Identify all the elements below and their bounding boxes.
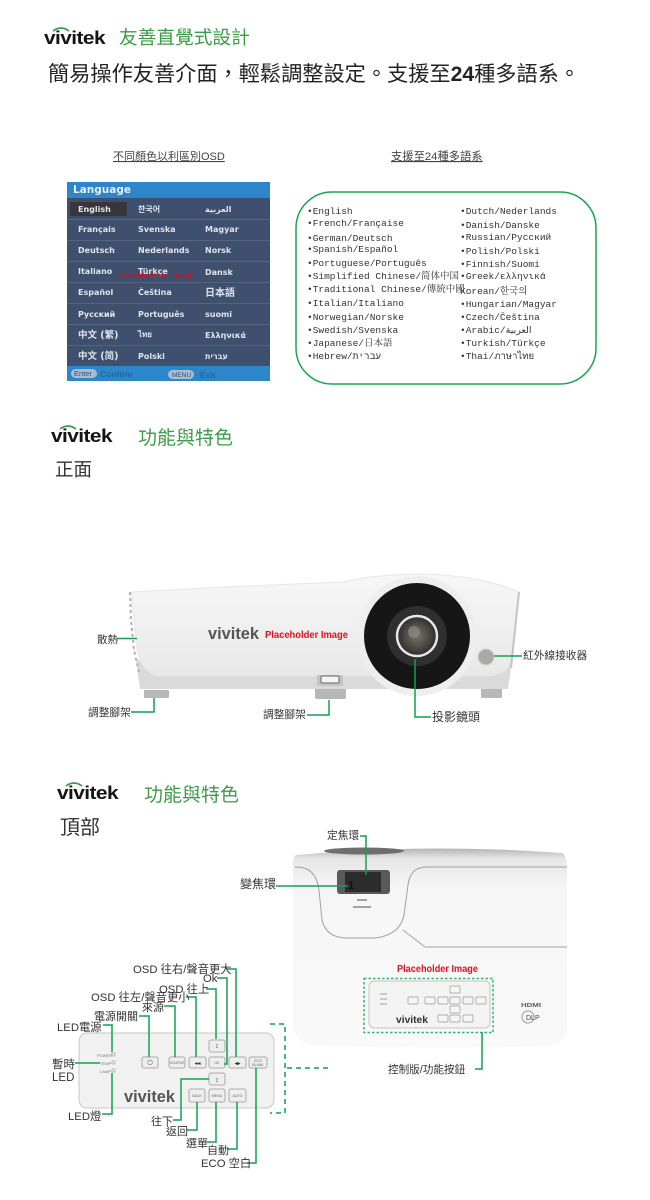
callout: source: 來源 <box>142 1000 164 1014</box>
language list right column: •Turkish/Türkçe <box>460 338 546 349</box>
green title: 功能與特色 <box>138 427 233 449</box>
LED indicators <box>97 1053 115 1074</box>
OSD language labels: Nederlands <box>138 246 190 255</box>
language list left column: •English <box>307 206 353 217</box>
projector top view <box>293 848 567 1048</box>
callout: control panel buttons <box>388 1032 482 1076</box>
OSD language labels: suomi <box>205 310 232 319</box>
vivitek logo: vivitek <box>51 425 113 446</box>
caption: OSD colours: 不同顏色以利區別OSD <box>113 149 225 163</box>
shell <box>131 574 519 676</box>
vents <box>130 592 139 672</box>
feet <box>144 686 502 699</box>
callout: back: 返回 <box>166 1124 188 1138</box>
callout: lamp LED: LED燈 <box>68 1109 101 1123</box>
language list left column: •Japanese/日本語 <box>307 337 393 349</box>
language list right column: •Dutch/Nederlands <box>460 206 557 217</box>
centre foot button <box>317 675 343 686</box>
language list left column: •Traditional Chinese/傳統中國 <box>307 283 465 295</box>
vivitek logo: vivitek <box>57 782 119 803</box>
callout: power <box>94 1009 149 1057</box>
panel: OSD language menu <box>67 182 270 381</box>
OSD language labels: 中文 (繁) <box>78 329 118 341</box>
projector front view <box>130 574 519 699</box>
language list left column: •German/Deutsch <box>307 233 393 244</box>
selected row <box>70 202 127 216</box>
callout: LED power <box>57 1020 112 1052</box>
language list left column: •Italian/Italiano <box>307 298 404 309</box>
OSD language labels: English <box>78 205 111 214</box>
callout: focus ring <box>327 829 366 875</box>
DLP mark: DLP <box>526 1015 540 1022</box>
callout: lens <box>415 659 480 724</box>
callout: left foot <box>88 698 154 719</box>
callout: OSD right: OSD 往右/聲音更大 <box>133 962 232 976</box>
language list left column: •French/Française <box>307 218 404 229</box>
section 2 heading: features <box>51 425 233 449</box>
callout: down <box>151 1079 209 1128</box>
callout: zoom ring <box>240 876 348 891</box>
callouts: control panel <box>52 962 256 1170</box>
DLP mark <box>522 1011 540 1023</box>
green title: 功能與特色 <box>144 784 239 806</box>
callout: menu <box>186 1102 216 1150</box>
callout: down: 往下 <box>151 1114 173 1128</box>
language list right column: •Arabic/العربية <box>460 325 532 336</box>
IR receiver <box>478 649 494 665</box>
placeholder mark: Placeholder Image <box>397 963 478 975</box>
buttons: SOURCE <box>170 1061 185 1065</box>
vivitek logo: vivitek <box>44 27 106 48</box>
OSD language labels: العربية <box>205 205 232 214</box>
OSD language labels: Dansk <box>205 268 233 277</box>
lens assembly <box>357 576 477 696</box>
OSD footer bar: Exit <box>200 370 216 380</box>
callout: centre foot <box>263 700 329 721</box>
language list right column: •Czech/Čeština <box>460 312 540 323</box>
OSD language labels: Русский <box>78 310 115 319</box>
language list left column: •Spanish/Español <box>307 244 399 255</box>
callout: lens: 投影鏡頭 <box>432 709 480 724</box>
OSD language labels: Norsk <box>205 246 232 255</box>
buttons <box>142 1040 267 1102</box>
zoom slot: 1 <box>348 880 354 892</box>
callout: temp LED: LED <box>52 1072 74 1084</box>
callout: lamp LED <box>68 1073 112 1123</box>
OSD language labels: 中文 (简) <box>78 350 118 362</box>
dashed connector <box>270 1024 332 1113</box>
callout: OK <box>203 973 227 1064</box>
front view label: 正面 <box>55 459 92 480</box>
placeholder mark: Placeholder Image <box>265 629 348 641</box>
language list left column: •Simplified Chinese/简体中国 <box>307 270 459 282</box>
callout: LED power: LED電源 <box>57 1020 102 1034</box>
panel logo: vivitek <box>124 1087 176 1106</box>
language list right column: •Hungarian/Magyar <box>460 299 557 310</box>
callout: power: 電源開關 <box>94 1009 138 1023</box>
lower band <box>136 660 512 689</box>
callout: OSD left: OSD 往左/聲音更小 <box>91 990 190 1004</box>
language list right column: Korean/한국의 <box>460 285 527 297</box>
intro sentence: 簡易操作友善介面，輕鬆調整設定。支援至24種多語系。 <box>48 62 580 86</box>
callout: auto <box>207 1102 237 1157</box>
language list left column <box>307 206 465 362</box>
callout: control panel buttons: 控制版/功能按鈕 <box>388 1063 466 1076</box>
OSD language labels: Magyar <box>205 225 239 234</box>
OSD language labels: Deutsch <box>78 246 115 255</box>
OSD footer bar: Enter <box>74 369 92 378</box>
green title: 友善直覺式設計 <box>119 27 250 48</box>
buttons: AUTO <box>233 1094 243 1098</box>
OSD language labels: עברית <box>205 352 228 361</box>
OSD language labels: Español <box>78 288 114 297</box>
callout: centre foot: 調整腳架 <box>263 708 306 721</box>
callout: zoom ring: 變焦環 <box>240 876 276 891</box>
caption: 24 languages: 支援至24種多語系 <box>391 149 483 163</box>
language list right column: •Polish/Polski <box>460 246 540 257</box>
top view label: 頂部 <box>60 816 100 839</box>
OSD language labels: ไทย <box>137 329 152 339</box>
OSD language labels: 日本語 <box>205 286 235 299</box>
callout: auto: 自動 <box>207 1143 229 1157</box>
callout: OSD right <box>133 962 236 1057</box>
buttons: ◂◂ <box>194 1061 201 1067</box>
callout: ECO blank <box>201 1068 256 1170</box>
language list left column: •Hebrew/עברית <box>307 351 381 362</box>
callouts: front view <box>88 633 587 724</box>
buttons: BACK <box>192 1094 202 1098</box>
buttons: ↕ <box>215 1077 219 1084</box>
LED indicators: TEMP <box>100 1061 111 1066</box>
language list right column <box>460 206 557 362</box>
callout: source <box>142 1000 175 1057</box>
language list right column: •Finnish/Suomi <box>460 259 540 270</box>
callout: IR receiver <box>494 649 587 662</box>
language list left column: •Norwegian/Norske <box>307 312 404 323</box>
callout: OSD up <box>159 982 216 1039</box>
top curves <box>295 867 567 947</box>
front logo: vivitek <box>208 624 260 643</box>
panel: supported languages list <box>296 192 596 384</box>
section 1 heading: friendly design <box>44 27 250 48</box>
language list right column: •Russian/Русский <box>460 232 551 243</box>
callouts: top view <box>240 829 482 1076</box>
callout: focus ring: 定焦環 <box>327 829 359 842</box>
LED indicators: POWER <box>97 1053 112 1058</box>
buttons: ⏻ <box>147 1059 153 1067</box>
OSD footer bar: Confirm <box>100 369 133 379</box>
callout: back <box>166 1102 197 1138</box>
buttons: ↕ <box>215 1043 219 1050</box>
OSD language labels: Italiano <box>78 267 113 276</box>
OSD language labels: Ελληνικά <box>205 331 247 340</box>
callout: left foot: 調整腳架 <box>88 706 131 719</box>
buttons: ECO <box>254 1059 262 1063</box>
HDMI mark: HDMI <box>521 1003 542 1009</box>
OSD language labels: 한국어 <box>138 204 160 214</box>
OSD language labels: Türkçe <box>138 267 168 276</box>
buttons: ◂▸ <box>234 1061 241 1067</box>
buttons: BLANK <box>252 1063 264 1067</box>
callout: heat vent <box>97 633 137 646</box>
callout: OSD left <box>91 990 196 1057</box>
OSD language labels: Svenska <box>138 225 176 234</box>
OSD language labels: Português <box>138 309 185 319</box>
OSD header bar: Language <box>73 184 131 196</box>
OSD footer bar: MENU <box>172 372 191 379</box>
OSD language labels: Polski <box>138 352 165 361</box>
callout: OK: Ok <box>203 973 218 985</box>
control panel miniature: vivitek <box>396 1014 428 1026</box>
placeholder watermark: Placeholder Image <box>120 273 193 281</box>
control panel enlarged <box>79 1033 274 1108</box>
OSD language labels: Čeština <box>138 286 172 297</box>
section 3 heading: features <box>57 782 239 806</box>
callout: IR receiver: 紅外線接收器 <box>523 649 587 662</box>
callout: OSD up: OSD 往上 <box>159 982 209 996</box>
callout: ECO blank: ECO 空白 <box>201 1156 251 1170</box>
small marks <box>353 900 371 907</box>
LED indicators: LAMP <box>100 1069 111 1074</box>
OSD header bar <box>67 182 270 198</box>
buttons: MENU <box>212 1094 223 1098</box>
callout: heat vent: 散熱 <box>97 633 118 646</box>
callout: temp LED: 暫時 <box>52 1057 75 1071</box>
language list right column: •Greek/ελληνικά <box>460 271 546 282</box>
callout: menu: 選單 <box>186 1137 208 1150</box>
zoom slot <box>337 870 390 894</box>
language list left column: •Portuguese/Português <box>307 258 427 269</box>
control panel miniature <box>364 978 493 1032</box>
language list left column: •Swedish/Svenska <box>307 325 399 336</box>
language list right column: •Thai/ภาษาไทย <box>460 350 534 362</box>
language list right column: •Danish/Danske <box>460 220 540 231</box>
OSD language labels: Français <box>78 225 116 234</box>
callout: temp LED <box>52 1057 100 1084</box>
lens recess <box>324 848 404 854</box>
OSD language labels <box>78 204 247 362</box>
OSD footer bar <box>67 366 270 381</box>
buttons: OK <box>214 1061 220 1065</box>
